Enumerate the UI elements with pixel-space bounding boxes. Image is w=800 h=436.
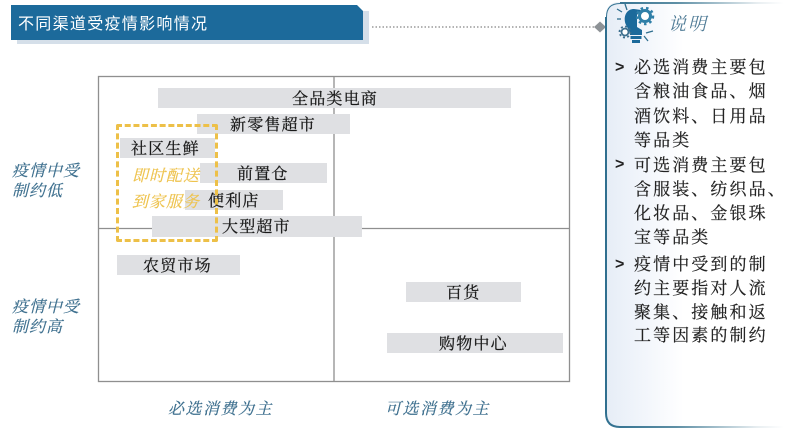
bar: 全品类电商: 全品类电商 <box>292 91 378 108</box>
note 2: > <box>615 156 624 173</box>
y axis label: low constraint: 疫情中受 <box>12 163 80 180</box>
title banner: 不同渠道受疫情影响情况 <box>18 16 208 33</box>
bar: 前置仓: 前置仓 <box>237 166 289 183</box>
y axis label: low constraint <box>12 162 81 200</box>
title banner <box>11 5 369 44</box>
note 3: 约主要指对人流 <box>634 279 768 298</box>
bar: 购物中心 <box>387 333 563 353</box>
bar: 大型超市 <box>152 216 362 237</box>
bar: 农贸市场 <box>117 255 240 275</box>
note 1 <box>615 58 768 150</box>
y axis label: high constraint: 制约高 <box>12 318 63 336</box>
x axis label: optional: 可选消费为主 <box>385 401 490 418</box>
bar: 购物中心: 购物中心 <box>439 336 508 353</box>
note 2: 化妆品、金银珠 <box>634 204 768 223</box>
bar: 百货: 百货 <box>446 285 480 302</box>
dotted connector with diamond <box>372 22 605 32</box>
bar: 社区生鲜: 社区生鲜 <box>131 141 200 158</box>
note 3 <box>615 255 768 345</box>
note 2: 含服装、纺织品、 <box>634 180 787 199</box>
note 1: 含粮油食品、烟 <box>634 82 768 101</box>
note 2: 宝等品类 <box>634 228 710 247</box>
bar: 前置仓 <box>200 163 327 183</box>
panel: explanation <box>605 2 774 428</box>
note 2 <box>615 156 787 247</box>
note 1: 等品类 <box>634 131 691 150</box>
bar: 便利店 <box>185 190 283 210</box>
label: 即时配送: 即时配送 <box>132 168 200 185</box>
bar: 大型超市: 大型超市 <box>222 219 291 236</box>
bar: 全品类电商 <box>158 88 511 108</box>
note 2: 可选消费主要包 <box>634 156 768 175</box>
note 3: 疫情中受到的制 <box>634 255 768 274</box>
y axis label: high constraint: 疫情中受 <box>12 299 80 316</box>
bar: 新零售超市: 新零售超市 <box>230 117 316 134</box>
note 1: 必选消费主要包 <box>634 58 768 77</box>
icon: lightbulb with gears <box>616 4 654 43</box>
label: 到家服务: 到家服务 <box>132 194 200 211</box>
y axis label: low constraint: 制约低 <box>12 182 63 200</box>
y axis label: high constraint <box>12 298 81 336</box>
x axis label: essential: 必选消费为主 <box>168 401 273 418</box>
bar: 便利店: 便利店 <box>208 193 260 210</box>
note 1: 酒饮料、日用品 <box>634 107 768 126</box>
bar: 新零售超市 <box>197 114 350 134</box>
bar: 社区生鲜 <box>120 138 215 158</box>
quadrant chart frame <box>98 76 570 382</box>
bar: 农贸市场: 农贸市场 <box>143 258 212 275</box>
note 3: > <box>615 256 624 273</box>
note 3: 聚集、接触和返 <box>634 303 768 322</box>
bar: 百货 <box>406 282 521 302</box>
dashed highlight box <box>116 124 218 242</box>
note 3: 工等因素的制约 <box>634 326 768 345</box>
panel heading: 说明 <box>668 14 708 34</box>
note 1: > <box>615 59 624 76</box>
